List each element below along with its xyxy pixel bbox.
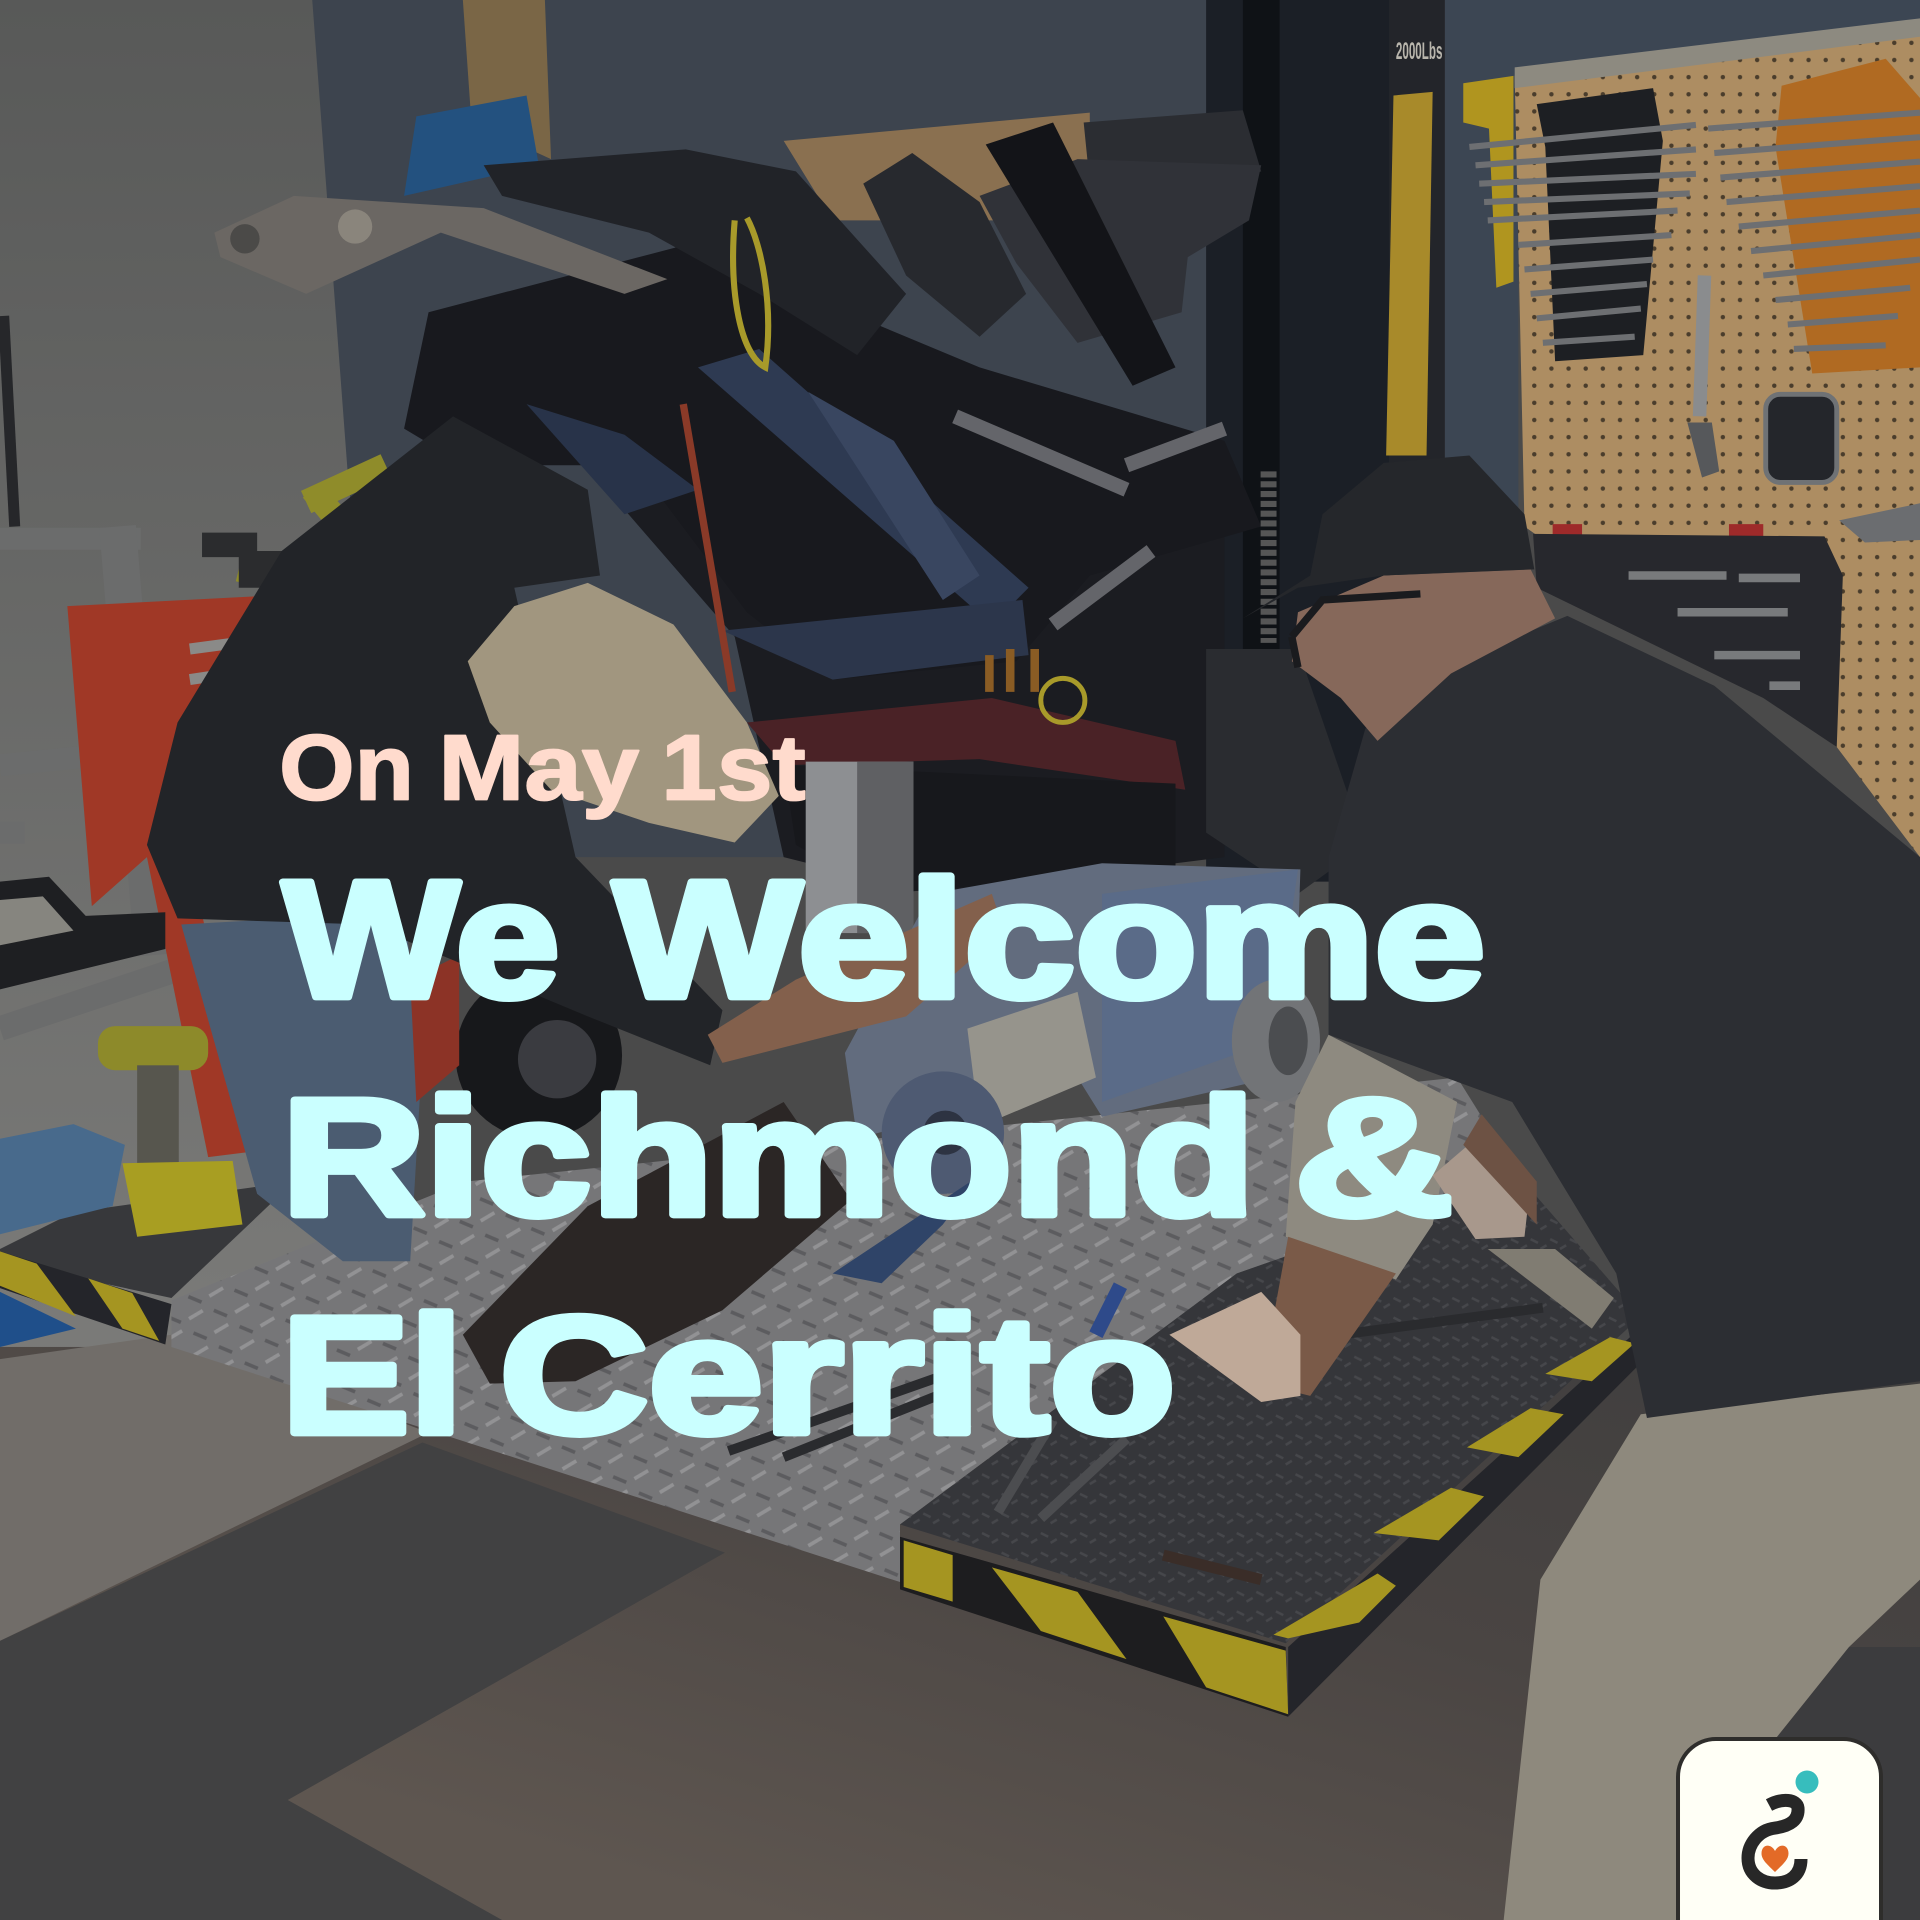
logo badge bbox=[1678, 1739, 1881, 1920]
wrench set orange holder bbox=[1776, 59, 1920, 373]
pegboard bbox=[1515, 24, 1920, 857]
right man shirt bbox=[1329, 616, 1920, 1418]
silver cylinder bbox=[806, 762, 913, 933]
folded black panel bbox=[463, 1102, 851, 1384]
chest lower red bbox=[410, 955, 459, 1102]
hammer bbox=[1839, 503, 1920, 542]
wood floor top left bbox=[0, 1335, 429, 1641]
logo heart bbox=[1762, 1846, 1789, 1872]
headline line 1: Welcome bbox=[613, 847, 1485, 1033]
right man cap bbox=[1243, 456, 1534, 618]
logo dot bbox=[1796, 1771, 1819, 1794]
yellow strap bbox=[733, 218, 768, 367]
red tags bbox=[1553, 524, 1763, 539]
small caster wheel bbox=[1232, 980, 1320, 1102]
backrest seat bbox=[484, 149, 906, 355]
pegboard top rail bbox=[1515, 18, 1920, 88]
flat floor bbox=[0, 1347, 1920, 1920]
headline line 3 bbox=[282, 1283, 1176, 1469]
diamond plate platform bbox=[171, 1078, 1518, 1582]
headline line 3: El bbox=[282, 1283, 463, 1469]
navy frame bbox=[698, 349, 1029, 624]
mounted gray parts bbox=[955, 416, 1224, 624]
left hazard stripe bbox=[0, 1251, 171, 1344]
gray footplate bbox=[214, 196, 667, 294]
left man cap bbox=[468, 583, 779, 842]
yellow cable bbox=[1041, 678, 1085, 722]
logo swirl bbox=[1748, 1800, 1801, 1883]
blue mat left bbox=[0, 1292, 76, 1347]
orange tool handles bbox=[989, 649, 1035, 692]
red tool chest bbox=[67, 594, 304, 1157]
wooden trim bbox=[463, 0, 551, 159]
antenna bbox=[4, 316, 15, 527]
headline line 1 bbox=[283, 847, 1485, 1033]
glove left bbox=[1169, 1292, 1300, 1402]
dark machinery backdrop bbox=[576, 453, 1224, 894]
yellow bracket bbox=[1463, 76, 1513, 288]
date line bbox=[279, 716, 806, 820]
yellow power tool on wall shelf bbox=[239, 465, 386, 588]
left man jeans bbox=[181, 912, 422, 1261]
wheelchair upper assembly bbox=[214, 110, 1261, 692]
impact drill bbox=[98, 1026, 242, 1237]
headline line 2: & bbox=[1294, 1065, 1453, 1251]
dark case on shelf bbox=[0, 877, 165, 989]
clamp bbox=[1766, 394, 1837, 482]
tool shelf bbox=[0, 527, 184, 1029]
side wall bbox=[1445, 0, 1920, 514]
right hazard stripe bbox=[1273, 1316, 1663, 1717]
date line: On bbox=[279, 716, 414, 820]
wrench set dark holder bbox=[1537, 88, 1663, 361]
glasses bbox=[1292, 594, 1420, 667]
front hazard stripe bbox=[900, 1537, 1288, 1717]
right man sleeve and forearm bbox=[1286, 1035, 1457, 1280]
headline line 2: Richmond bbox=[282, 1065, 1255, 1251]
chair drive base bbox=[845, 863, 1300, 1139]
rear blue wall bbox=[312, 0, 1212, 857]
blue storage bin bbox=[404, 96, 539, 196]
capacity banner bbox=[1390, 0, 1445, 465]
red body shell bbox=[747, 698, 1185, 790]
lift column bbox=[1206, 0, 1390, 882]
pillar base and chain bbox=[1206, 649, 1365, 894]
headline line 3: Cerrito bbox=[500, 1283, 1176, 1469]
headline line 1: We bbox=[283, 847, 560, 1033]
red rod bbox=[683, 404, 732, 692]
wrenches bbox=[1469, 113, 1920, 349]
date line: May bbox=[438, 716, 639, 820]
right man pants bbox=[1504, 1384, 1920, 1920]
right man head bbox=[1292, 569, 1555, 741]
headline line 2 bbox=[282, 1065, 1453, 1251]
left wall bbox=[0, 0, 367, 1371]
tools on platform bbox=[729, 1308, 1543, 1457]
badge card bbox=[1678, 1739, 1881, 1920]
dark interior bbox=[784, 765, 1176, 894]
rear pegboard strip bbox=[784, 113, 1090, 220]
upper floor dark plate bbox=[0, 1182, 294, 1298]
date line: 1st bbox=[661, 716, 806, 820]
text block: headline bbox=[279, 716, 1485, 1469]
photo background: workshop repair scene: 2000Lbs bbox=[1396, 38, 1442, 65]
dark carpet bbox=[0, 1442, 725, 1920]
left man arm bbox=[708, 894, 1004, 1063]
dark floor wedge bbox=[1690, 1647, 1920, 1920]
dark plate platform bbox=[900, 1176, 1641, 1643]
black tire bbox=[456, 972, 622, 1139]
left man shirt bbox=[147, 416, 722, 1065]
glove right bbox=[1433, 1139, 1531, 1239]
single hanging wrench bbox=[1700, 276, 1704, 416]
tool case bbox=[1533, 534, 1843, 747]
blue bin on floor bbox=[0, 1124, 125, 1234]
